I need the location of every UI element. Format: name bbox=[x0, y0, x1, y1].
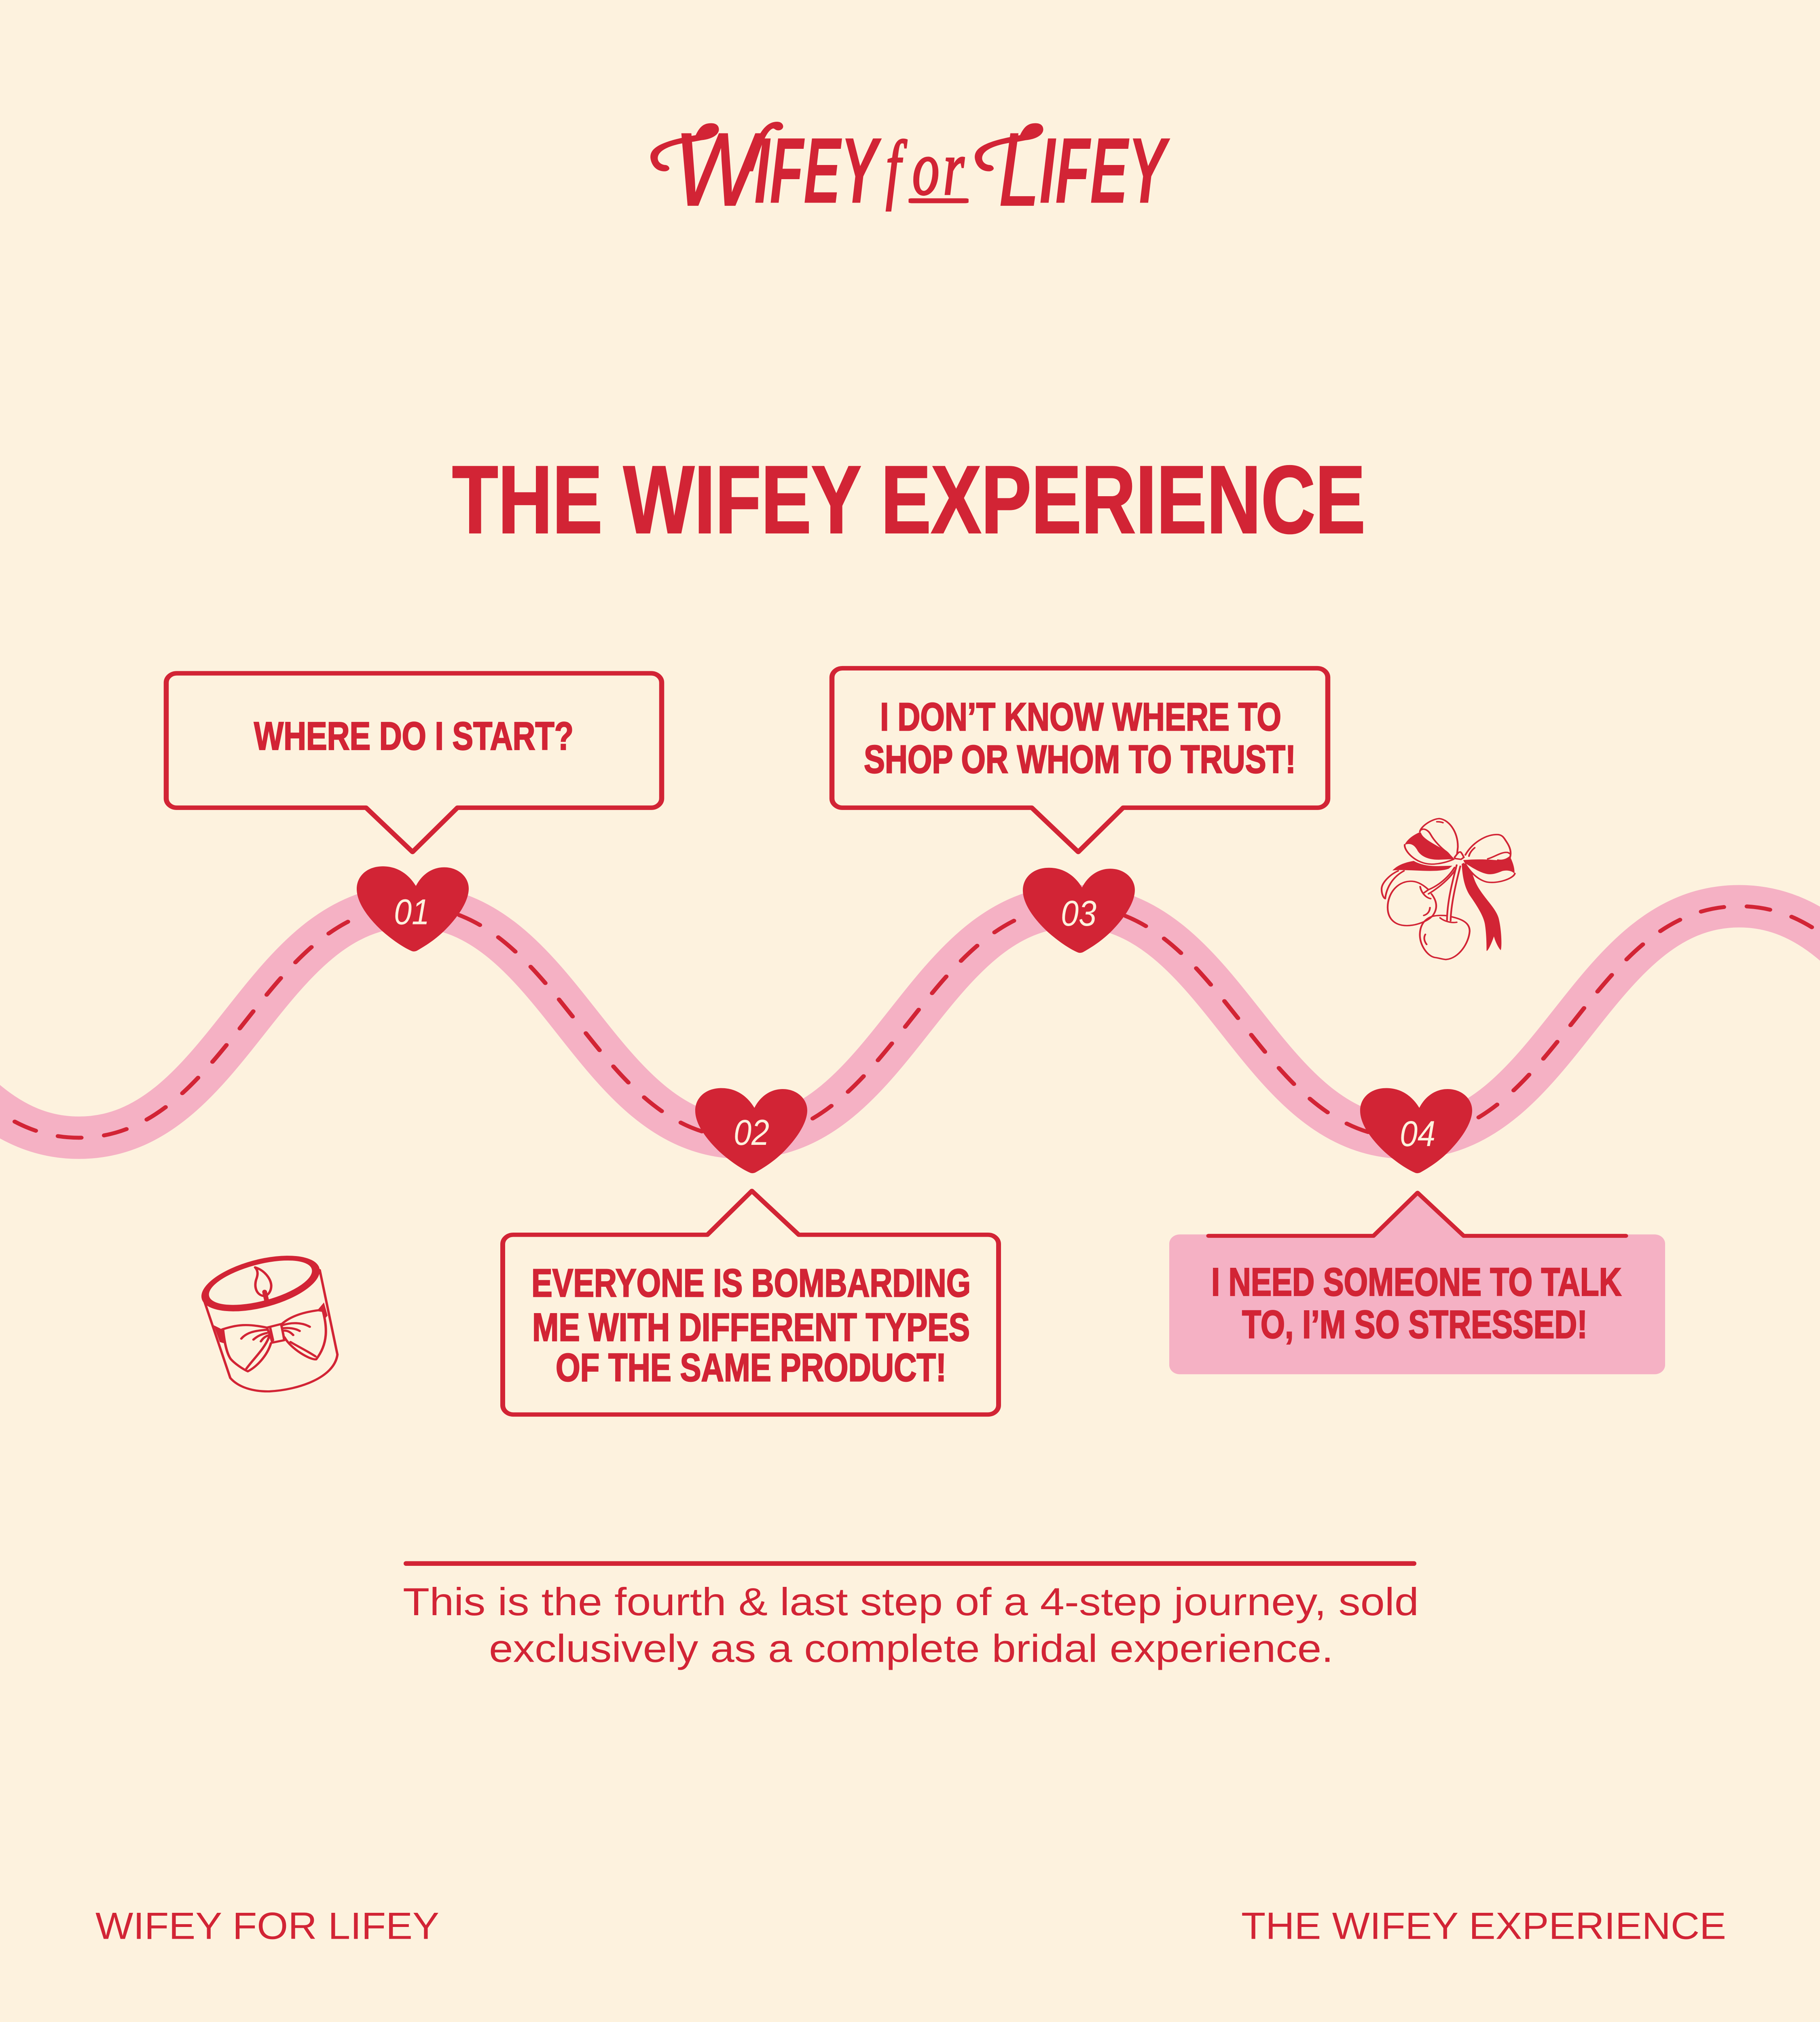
logo: Wifey for Lifey: for bbox=[886, 125, 965, 211]
bubble 3 text bbox=[864, 695, 1296, 782]
logo: Wifey for Lifey: IFEY bbox=[754, 118, 882, 223]
bubble 3 text: SHOP OR WHOM TO TRUST! bbox=[864, 738, 1296, 782]
heart marker 04 bbox=[1360, 1088, 1472, 1173]
bubble 4 text: I NEED SOMEONE TO TALK bbox=[1211, 1260, 1621, 1304]
bubble 4 text: TO, I’M SO STRESSED! bbox=[1242, 1303, 1587, 1347]
divider above note bbox=[404, 1561, 1416, 1566]
heart marker 03: 03 bbox=[1061, 893, 1096, 934]
bubble 2 text: OF THE SAME PRODUCT! bbox=[556, 1346, 946, 1390]
heart marker 01: 01 bbox=[394, 892, 430, 932]
speech bubble 1 bbox=[166, 673, 662, 852]
bubble 2 text bbox=[531, 1261, 971, 1390]
title: THE WIFEY EXPERIENCE bbox=[452, 446, 1365, 553]
icon: candle with bow bbox=[194, 1245, 337, 1392]
note text: This is the fourth & last step of a 4-step journey, sold bbox=[403, 1580, 1419, 1623]
footer left: WIFEY FOR LIFEY bbox=[95, 1905, 439, 1947]
wavy journey path bbox=[0, 906, 1820, 1138]
bubble 4 text bbox=[1211, 1260, 1621, 1347]
logo: Wifey for Lifey: W bbox=[675, 112, 765, 227]
speech bubble 2 bbox=[503, 1191, 999, 1415]
note text bbox=[403, 1580, 1419, 1670]
bubble 2 text: ME WITH DIFFERENT TYPES bbox=[532, 1305, 970, 1349]
bubble 3 text: I DON’T KNOW WHERE TO bbox=[880, 695, 1281, 739]
logo: Wifey for Lifey bbox=[650, 112, 1170, 227]
heart marker 04: 04 bbox=[1400, 1114, 1435, 1154]
logo: Wifey for Lifey: L bbox=[999, 112, 1039, 227]
heart marker 02 bbox=[695, 1088, 807, 1173]
speech bubble 3 bbox=[832, 668, 1328, 852]
heart marker 03 bbox=[1023, 868, 1135, 953]
logo: Wifey for Lifey: IFEY bbox=[1039, 118, 1170, 223]
speech bubble 4, highlighted bbox=[1169, 1191, 1665, 1374]
heart marker 02: 02 bbox=[734, 1113, 769, 1153]
note text: exclusively as a complete bridal experience. bbox=[489, 1626, 1333, 1670]
footer right: THE WIFEY EXPERIENCE bbox=[1241, 1905, 1726, 1947]
heart marker 01 bbox=[357, 866, 469, 952]
icon: cherries with bow bbox=[1382, 819, 1515, 960]
bubble 2 text: EVERYONE IS BOMBARDING bbox=[531, 1261, 971, 1305]
bubble 1 text: WHERE DO I START? bbox=[254, 714, 574, 758]
